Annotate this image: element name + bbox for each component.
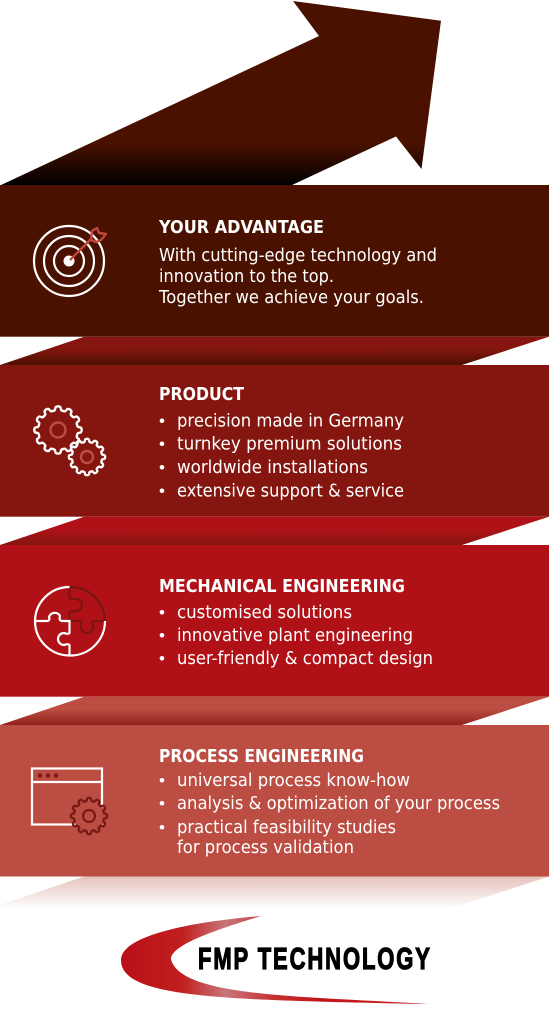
fold: fading shadow below process engineering: [0, 876, 549, 909]
list: product: •: [159, 482, 165, 500]
heading: your advantage: YOUR ADVANTAGE: [158, 217, 324, 238]
icon: window with gear: [32, 768, 107, 834]
list: process engineering: universal process know-how: [177, 771, 410, 791]
list: process engineering: practical feasibility studies: [177, 818, 396, 838]
icon: gears: [34, 406, 105, 475]
logo wordmark: FMP TECHNOLOGY: [198, 941, 432, 976]
big arrow: [0, 1, 441, 186]
fold: product to mechanical engineering: [0, 517, 549, 545]
list: process engineering: analysis & optimization of your process: [177, 794, 500, 814]
list: mechanical engineering: [159, 603, 433, 669]
list: mechanical engineering: •: [159, 603, 165, 622]
panel: mechanical engineering: [0, 545, 549, 697]
list: process engineering: •: [159, 771, 165, 790]
list: process engineering: [159, 771, 500, 858]
list: mechanical engineering: •: [159, 649, 165, 668]
list: mechanical engineering: user-friendly & compact design: [177, 649, 433, 669]
text: your advantage description: [158, 245, 437, 308]
panel: process engineering: [0, 725, 549, 876]
list: product: turnkey premium solutions: [177, 434, 402, 454]
text: your advantage description: Together we achieve your goals.: [158, 287, 424, 308]
icon: puzzle: [35, 587, 105, 656]
list: process engineering: •: [159, 818, 165, 837]
heading: process engineering: PROCESS ENGINEERING: [159, 746, 364, 767]
text: your advantage description: With cutting-edge technology and: [159, 245, 437, 266]
list: product: •: [159, 434, 165, 454]
list: product: •: [159, 412, 165, 430]
heading: mechanical engineering: MECHANICAL ENGINEERING: [159, 576, 405, 597]
list: product: extensive support & service: [177, 482, 404, 502]
list: mechanical engineering: •: [159, 626, 165, 645]
list: product: worldwide installations: [177, 458, 368, 478]
list: process engineering: for process validation: [177, 838, 354, 858]
list: product: •: [159, 458, 165, 477]
list: mechanical engineering: innovative plant engineering: [177, 626, 413, 646]
icon: target with dart: [34, 226, 106, 296]
list: product: [159, 412, 404, 502]
list: mechanical engineering: customised solutions: [177, 603, 352, 623]
logo swoosh: [121, 916, 428, 1004]
list: process engineering: •: [159, 794, 165, 813]
list: product: precision made in Germany: [177, 412, 404, 432]
fold: mechanical to process engineering: [0, 697, 549, 725]
heading: product: PRODUCT: [159, 384, 245, 405]
panel: your advantage: [0, 185, 549, 337]
logo: FMP Technology: [121, 916, 432, 1004]
fold: advantage to product: [0, 337, 549, 365]
panel: product: [0, 365, 549, 517]
text: your advantage description: innovation to the top.: [159, 266, 334, 287]
